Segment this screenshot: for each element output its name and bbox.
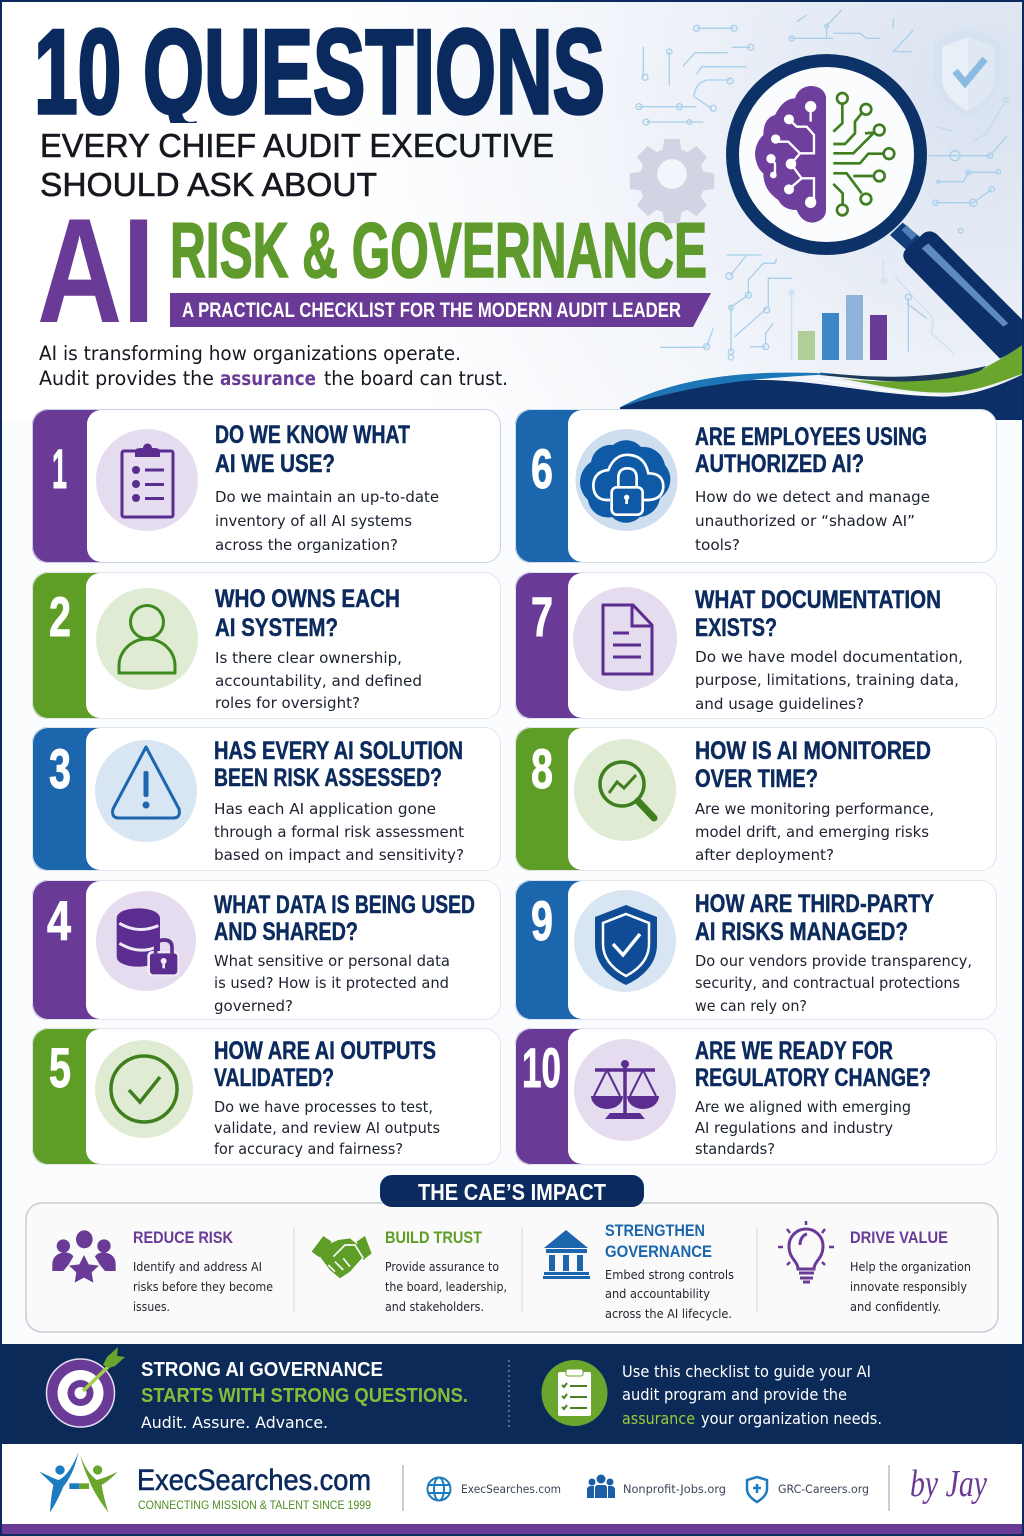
description: Embed strong controls [605, 1267, 734, 1282]
label: DRIVE VALUE [850, 1228, 948, 1247]
heading: EXISTS? [695, 614, 777, 642]
heading: AUTHORIZED AI? [695, 450, 864, 478]
body text: Do we have model documentation, [695, 648, 963, 666]
icon: check circle [95, 1040, 193, 1138]
body text [214, 952, 450, 1015]
body text: roles for oversight? [215, 694, 360, 712]
signature: by Jay: by Jay [910, 1463, 987, 1505]
icon: magnifying glass with brain [732, 60, 1024, 359]
tagline: CONNECTING MISSION & TALENT SINCE 1999 [138, 1500, 371, 1512]
statement: Audit. Assure. Advance. [141, 1413, 328, 1432]
dividers [294, 1228, 757, 1312]
description: risks before they become [133, 1279, 273, 1294]
body text: accountability, and defined [215, 672, 422, 690]
background circuit pattern [636, 10, 1008, 233]
description: Help the organization [850, 1259, 971, 1274]
description [605, 1267, 734, 1321]
body text: Is there clear ownership, [215, 649, 402, 667]
panel: question 6 [515, 409, 996, 563]
number: 9 [531, 889, 553, 952]
dashed divider [508, 1360, 510, 1428]
icon: magnifier with trend line [574, 739, 676, 841]
heading: VALIDATED? [214, 1064, 334, 1092]
label [605, 1221, 712, 1261]
item: drive value [778, 1221, 971, 1314]
intro text: the board can trust. [324, 367, 508, 390]
icon: green clipboard [542, 1360, 608, 1426]
intro text [39, 342, 508, 390]
icon: warning triangle [95, 740, 197, 842]
number: 10 [522, 1036, 561, 1099]
label: STRENGTHEN [605, 1221, 705, 1240]
heading [695, 586, 941, 642]
panel: the CAE's impact [26, 1175, 998, 1332]
body text: model drift, and emerging risks [695, 823, 929, 841]
item: strengthen governance [543, 1221, 734, 1321]
body text: purpose, limitations, training data, [695, 671, 959, 689]
panel: question 2 [32, 572, 500, 719]
body text: Do we have processes to test, [214, 1098, 433, 1116]
body text: Do our vendors provide transparency, [695, 952, 972, 970]
body text: standards? [695, 1140, 775, 1158]
body text: Are we monitoring performance, [695, 800, 934, 818]
description [385, 1259, 507, 1314]
heading [215, 421, 410, 478]
heading: WHAT DOCUMENTATION [695, 586, 941, 614]
subtitle [40, 128, 554, 204]
logo mark [39, 1452, 118, 1512]
body text: is used? How is it protected and [214, 974, 449, 992]
number: 4 [47, 889, 71, 952]
heading: DO WE KNOW WHAT [215, 421, 410, 449]
number: 8 [531, 737, 553, 800]
panel: question 9 [515, 880, 996, 1020]
statement: STARTS WITH STRONG QUESTIONS. [141, 1384, 468, 1407]
brain [755, 86, 826, 223]
body text: Are we aligned with emerging [695, 1098, 911, 1116]
description: and stakeholders. [385, 1299, 484, 1314]
title: 10 QUESTIONS: 10 QUESTIONS [34, 5, 605, 139]
description: and confidently. [850, 1299, 941, 1314]
body text: What sensitive or personal data [214, 952, 450, 970]
icon: target with arrow [46, 1347, 125, 1427]
heading: OVER TIME? [695, 765, 818, 793]
heading [695, 737, 931, 793]
decorative swoosh [620, 344, 1024, 420]
body text [695, 1098, 911, 1158]
body text [214, 800, 464, 864]
intro text: Audit provides the [39, 367, 214, 390]
body text: validate, and review AI outputs [214, 1119, 440, 1137]
heading: AND SHARED? [214, 918, 358, 946]
statement: STRONG AI GOVERNANCE [141, 1358, 383, 1381]
bar chart [798, 295, 887, 360]
body text: we can rely on? [695, 997, 807, 1015]
icon: checklist clipboard [96, 429, 198, 531]
icon: person [96, 588, 198, 690]
heading: ARE EMPLOYEES USING [695, 423, 927, 451]
body text: unauthorized or “shadow AI” [695, 512, 915, 530]
description: issues. [133, 1299, 170, 1314]
heading [214, 891, 475, 946]
body text: inventory of all AI systems [215, 512, 412, 530]
link: ExecSearches.com [428, 1478, 561, 1500]
heading [215, 585, 400, 642]
header background [0, 0, 1024, 420]
description: the board, leadership, [385, 1279, 507, 1294]
panel: question 7 [515, 572, 996, 719]
dividers [403, 1465, 889, 1511]
description: Identify and address AI [133, 1259, 262, 1274]
subtitle: EVERY CHIEF AUDIT EXECUTIVE [40, 128, 554, 165]
icon: pale shield [934, 28, 1001, 117]
heading: risk and governance: RISK & GOVERNANCE [170, 206, 707, 294]
call-to-action band [0, 1344, 1024, 1444]
intro text: assurance [220, 367, 316, 390]
body text: security, and contractual protections [695, 974, 960, 992]
link: GRC-Careers.org [747, 1477, 869, 1502]
guidance text: your organization needs. [701, 1409, 882, 1428]
intro text: AI is transforming how organizations operate. [39, 342, 461, 365]
body text [214, 1098, 440, 1158]
heading pill [380, 1175, 644, 1207]
body text: across the organization? [215, 536, 398, 554]
number: 3 [49, 737, 71, 800]
panel: question 8 [515, 727, 996, 871]
bottom accent strip [0, 1524, 1024, 1536]
body text [215, 488, 439, 554]
heading [695, 890, 934, 946]
lower circuit pattern [660, 255, 953, 360]
body text: Do we maintain an up-to-date [215, 488, 439, 506]
heading [214, 737, 463, 792]
description [133, 1259, 273, 1314]
heading: HOW ARE THIRD-PARTY [695, 890, 934, 918]
link: Nonprofit-Jobs.org [587, 1474, 726, 1498]
heading: REGULATORY CHANGE? [695, 1064, 931, 1092]
label: GOVERNANCE [605, 1242, 712, 1261]
banner: practical checklist [170, 293, 711, 327]
body text [215, 649, 422, 712]
heading [695, 423, 927, 478]
description: and accountability [605, 1286, 711, 1301]
icon: people with star [52, 1230, 116, 1283]
icon: handshake [312, 1236, 372, 1278]
brand name: ExecSearches.com [137, 1464, 371, 1497]
heading: AI SYSTEM? [215, 614, 338, 642]
body text: How do we detect and manage [695, 488, 930, 506]
heading: AI: AI [37, 187, 155, 354]
item: reduce risk [52, 1228, 273, 1314]
body text: tools? [695, 536, 740, 554]
item: build trust [312, 1228, 507, 1314]
description: innovate responsibly [850, 1279, 968, 1294]
heading: HOW ARE AI OUTPUTS [214, 1037, 436, 1065]
panel: question 10 [515, 1028, 996, 1165]
panel: question 4 [32, 880, 500, 1020]
guidance text: Use this checklist to guide your AI [622, 1362, 871, 1381]
icon: database with lock [96, 891, 196, 991]
label: REDUCE RISK [133, 1228, 234, 1247]
panel: question 3 [32, 727, 500, 871]
link: ExecSearches.com: ExecSearches.com [461, 1482, 561, 1496]
body text: through a formal risk assessment [214, 823, 464, 841]
subtitle: SHOULD ASK ABOUT [40, 167, 377, 204]
link: GRC-Careers.org: GRC-Careers.org [778, 1482, 869, 1496]
heading: AI WE USE? [215, 450, 335, 478]
number: 7 [531, 585, 553, 648]
body text: governed? [214, 997, 293, 1015]
icon: institution [543, 1230, 590, 1279]
circuit traces [833, 93, 894, 215]
guidance text: audit program and provide the [622, 1385, 847, 1404]
heading [695, 1037, 931, 1092]
body text: AI regulations and industry [695, 1119, 893, 1137]
heading pill: THE CAE’S IMPACT [418, 1179, 606, 1205]
heading: WHAT DATA IS BEING USED [214, 891, 475, 919]
link: Nonprofit-Jobs.org: Nonprofit-Jobs.org [623, 1482, 726, 1496]
icon: gear [630, 139, 714, 223]
body text: and usage guidelines? [695, 695, 864, 713]
icon: shield with check [574, 890, 676, 992]
heading: BEEN RISK ASSESSED? [214, 764, 442, 792]
body text [695, 952, 972, 1015]
body text: Has each AI application gone [214, 800, 436, 818]
body text: after deployment? [695, 846, 834, 864]
heading: AI RISKS MANAGED? [695, 918, 908, 946]
panel: question 1 [32, 409, 500, 563]
heading: ARE WE READY FOR [695, 1037, 893, 1065]
description: across the AI lifecycle. [605, 1306, 732, 1321]
statement [141, 1358, 468, 1432]
number: 6 [531, 437, 553, 500]
panel: question 5 [32, 1028, 500, 1165]
label: BUILD TRUST [385, 1228, 483, 1247]
heading: HAS EVERY AI SOLUTION [214, 737, 463, 765]
body text: based on impact and sensitivity? [214, 846, 464, 864]
heading [214, 1037, 436, 1092]
description: Provide assurance to [385, 1259, 499, 1274]
body text: for accuracy and fairness? [214, 1140, 403, 1158]
icon: lightbulb [778, 1221, 834, 1282]
banner: practical checklist: A PRACTICAL CHECKLIST FOR THE MODERN AUDIT LEADER [182, 298, 681, 322]
icon: document [573, 587, 677, 691]
heading: WHO OWNS EACH [215, 585, 400, 613]
description [850, 1259, 971, 1314]
magnifier handle [890, 223, 1024, 359]
number: 2 [49, 585, 71, 648]
guidance text: assurance [622, 1409, 695, 1428]
icon: cloud lock [576, 429, 678, 531]
footer [0, 1444, 1024, 1524]
panel: question 1: 1 [52, 437, 67, 500]
body text [695, 648, 963, 713]
heading: HOW IS AI MONITORED [695, 737, 931, 765]
icon: scales of justice [574, 1039, 676, 1141]
body text [695, 800, 934, 864]
guidance text [622, 1362, 882, 1428]
number: 5 [49, 1036, 71, 1099]
body text [695, 488, 930, 554]
